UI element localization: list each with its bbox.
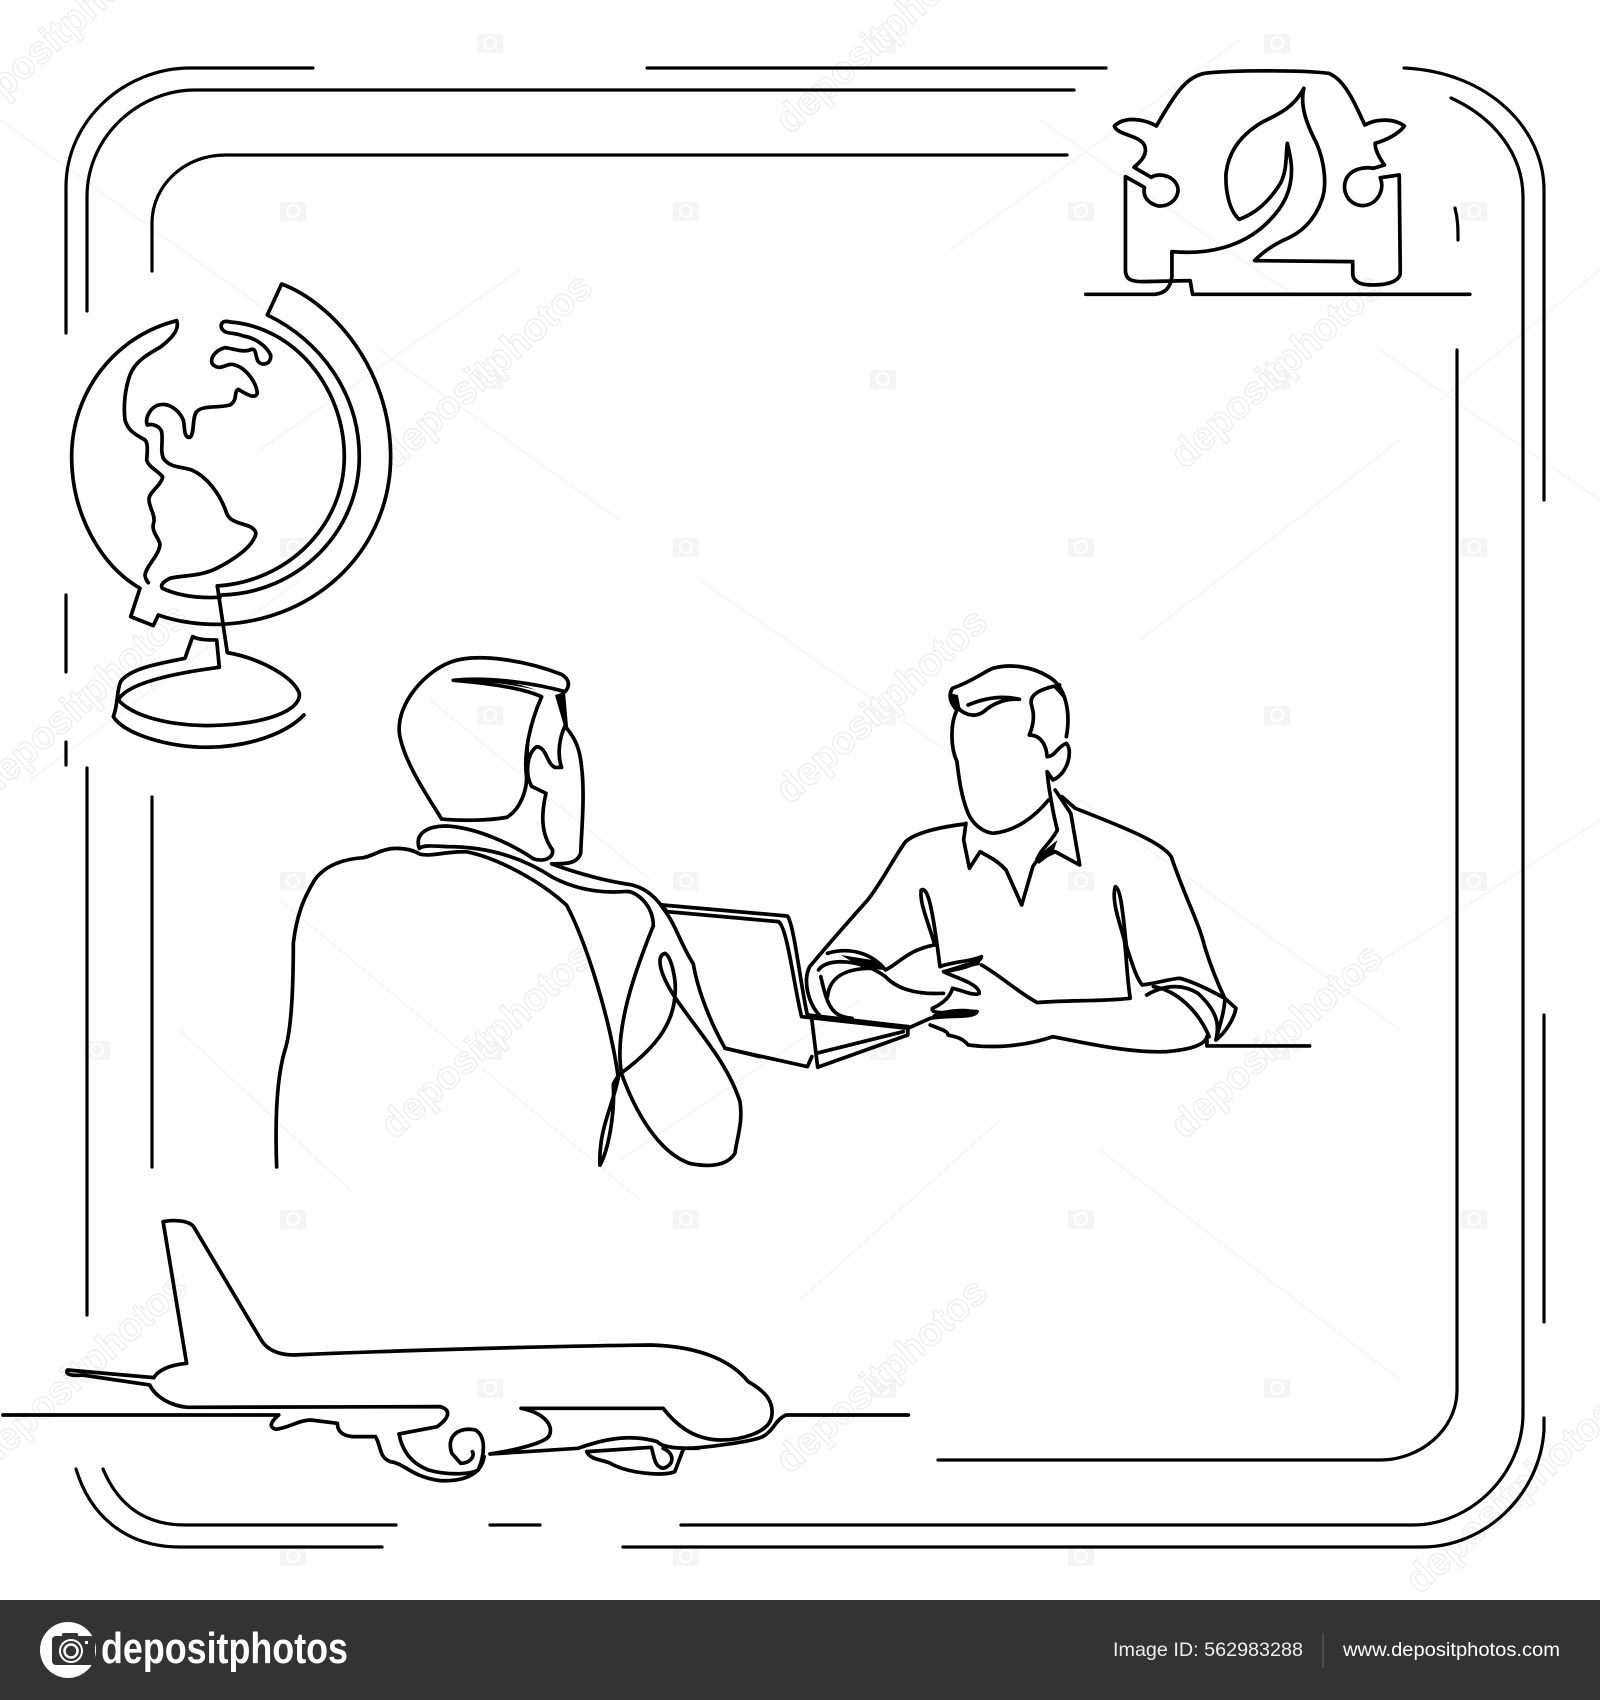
icon: airplane on runway xyxy=(3,1221,908,1481)
watermark pattern: depositphotos xyxy=(767,600,996,812)
thick hair, collar and finger marks xyxy=(841,685,1068,1018)
watermark pattern: depositphotos xyxy=(1162,265,1391,477)
figure: man seen from behind xyxy=(276,658,760,1167)
website url: www.depositphotos.com xyxy=(1342,1639,1560,1661)
thick hair and ear marks xyxy=(453,678,568,781)
icon: desk globe xyxy=(72,284,391,747)
figure: man seated facing viewer xyxy=(807,666,1310,1052)
right cuff xyxy=(1147,987,1236,1040)
shirt right xyxy=(981,797,1225,1003)
watermark pattern: depositphotos xyxy=(767,1270,996,1482)
ear, neck and collar xyxy=(964,685,1069,905)
forearm and table line xyxy=(930,1025,1310,1052)
logo wordmark: depositphotos xyxy=(101,1624,348,1673)
head and hair xyxy=(399,658,568,820)
left cuff and hand xyxy=(827,890,981,1028)
laptop xyxy=(662,905,908,1067)
image id: Image ID: 562983288 xyxy=(1113,1639,1303,1661)
jacket, neck and arm loop xyxy=(276,726,760,1167)
watermark pattern: depositphotos xyxy=(372,935,601,1147)
watermark pattern: depositphotos xyxy=(1162,935,1391,1147)
footer bar xyxy=(0,1600,1600,1700)
face and hair xyxy=(950,666,1068,833)
watermark pattern: depositphotos xyxy=(372,265,601,477)
divider xyxy=(1322,1633,1324,1668)
logo camera badge xyxy=(40,1622,96,1678)
shirt left xyxy=(807,824,965,1017)
icon: eco car with leaf xyxy=(1086,71,1470,294)
